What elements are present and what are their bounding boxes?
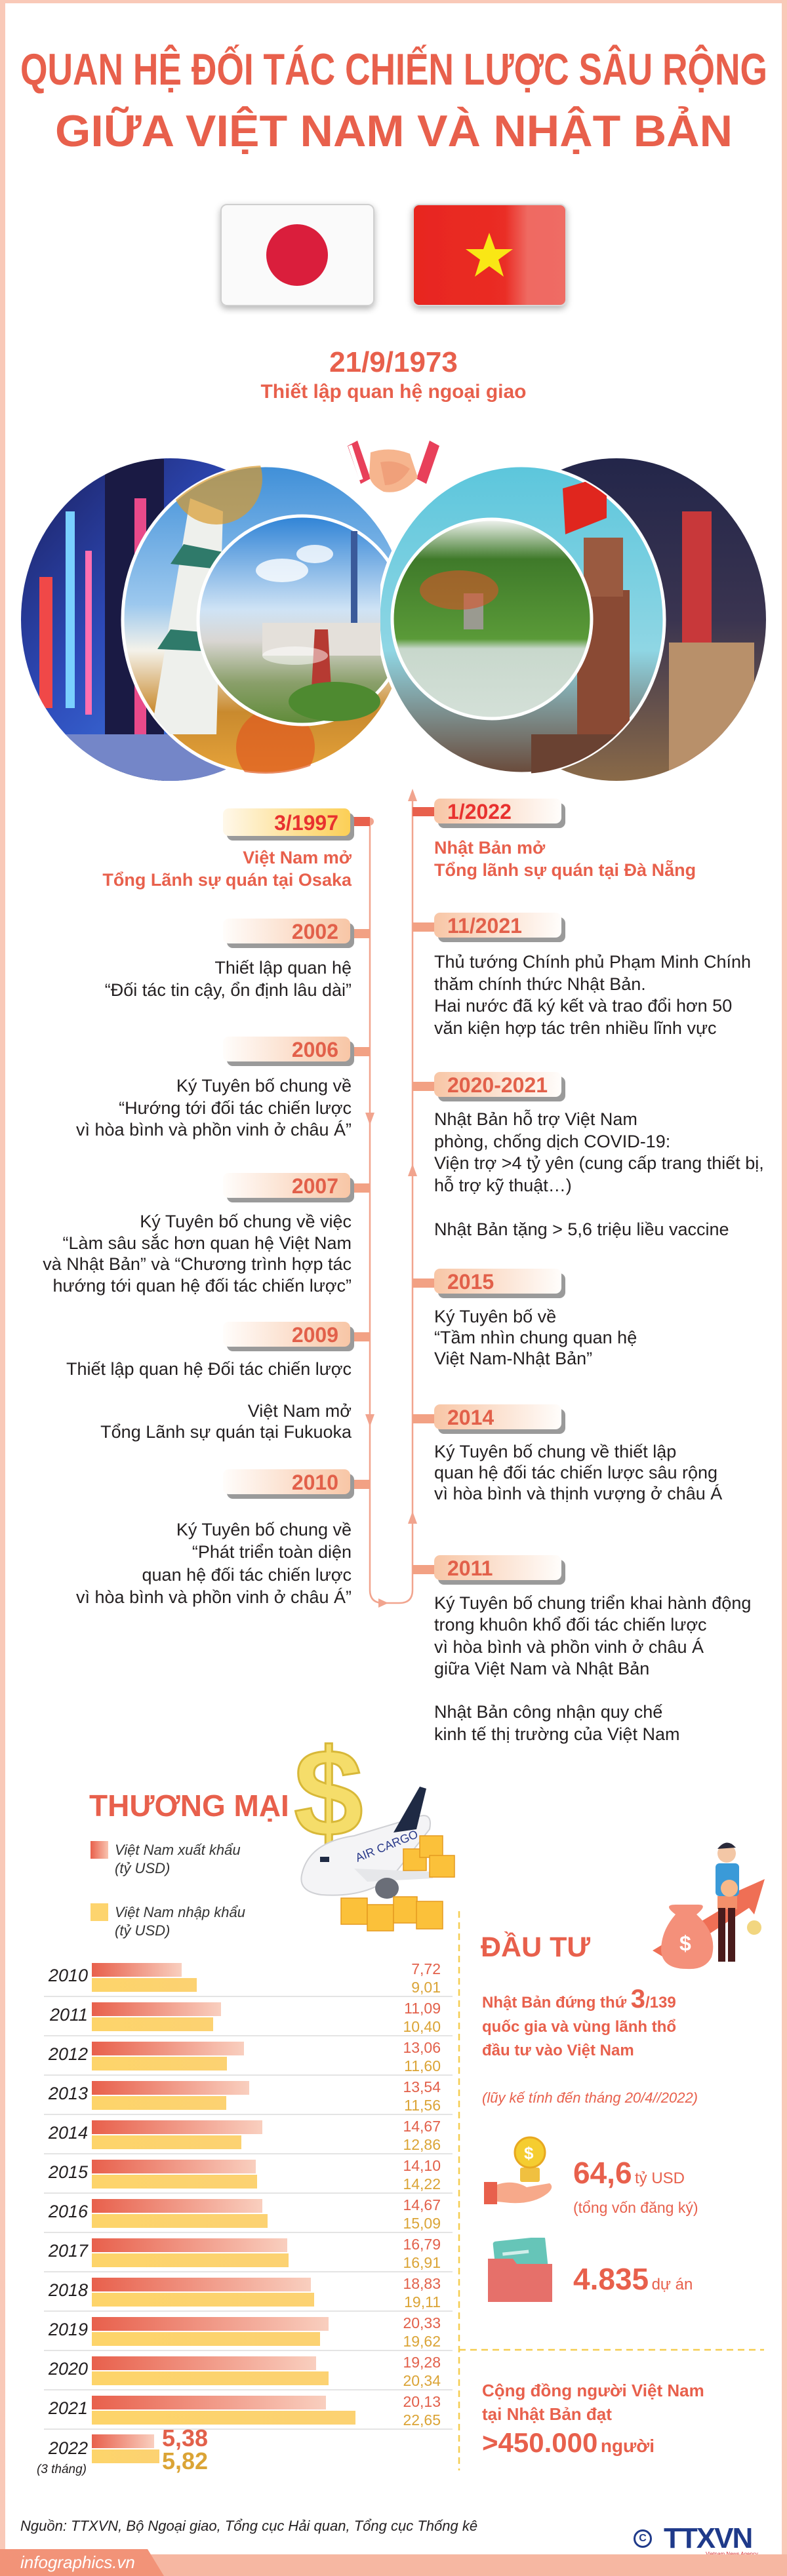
- bar chart: trade: 14,10: [403, 2157, 441, 2174]
- stat: projects: 4.835 dự án: [573, 2262, 693, 2296]
- bar chart: trade: 2019: [48, 2320, 88, 2339]
- flags: [216, 203, 571, 313]
- logo: TTXVN: Vietnam News Agency: [706, 2551, 758, 2557]
- bar chart: trade: 14,67: [403, 2196, 441, 2213]
- text: 2007: hướng tới quan hệ đối tác chiến lược”: [52, 1276, 352, 1296]
- text: 2015: Việt Nam-Nhật Bản”: [434, 1349, 592, 1368]
- text: 2006: “Hướng tới đối tác chiến lược: [119, 1098, 352, 1117]
- heading: THƯƠNG MẠI: THƯƠNG MẠI: [89, 1789, 289, 1823]
- badge: 2007: [223, 1173, 370, 1202]
- text: Vietnamese community: Cộng đồng người Việt Nam: [482, 2381, 704, 2400]
- text: 2010: Ký Tuyên bố chung về: [176, 1520, 352, 1539]
- text: cumulative note: (lũy kế tính đến tháng 20/4//2022): [482, 2090, 698, 2106]
- photo: flag tower: [378, 466, 664, 787]
- badge: 2011: 2011: [447, 1556, 493, 1580]
- bar chart: trade: 16,91: [403, 2254, 441, 2271]
- bar chart: trade: 19,62: [403, 2333, 441, 2350]
- text: 2014: quan hệ đối tác chiến lược sâu rộng: [434, 1463, 717, 1482]
- bar chart: trade: 2021: [48, 2398, 88, 2418]
- legend: import: [91, 1903, 245, 1939]
- text: 11/2021: văn kiện hợp tác trên nhiều lĩnh vực: [434, 1018, 717, 1037]
- text: 11/2021: [434, 952, 751, 1037]
- text: 11/2021: Hai nước đã ký kết và trao đổi hơn 50: [434, 996, 732, 1016]
- bar chart: trade: 14,67: [403, 2118, 441, 2135]
- bar chart: trade: 22,65: [403, 2411, 441, 2428]
- text: investment ranking: [482, 1985, 676, 2059]
- text: 2010: quan hệ đối tác chiến lược: [142, 1565, 352, 1585]
- photo collage: Vietnam: [380, 458, 766, 781]
- footer band: [0, 2554, 787, 2576]
- legend: export: (tỷ USD): [115, 1860, 170, 1876]
- text: 2020-2021: Nhật Bản tặng > 5,6 triệu liều vaccine: [434, 1219, 729, 1239]
- text: 2015: [434, 1307, 637, 1368]
- text: 2015: Ký Tuyên bố về: [434, 1307, 556, 1326]
- footer: infographics.vn tab: [0, 2549, 164, 2576]
- bar chart: trade: 13,06: [403, 2039, 441, 2056]
- bar chart: trade: 2017: [48, 2241, 89, 2261]
- badge: 3/1997: 3/1997: [274, 811, 338, 835]
- text: 2014: vì hòa bình và thịnh vượng ở châu Á: [434, 1484, 722, 1503]
- bar chart: trade: 18,83: [403, 2275, 441, 2292]
- text: investment ranking: Nhật Bản đứng thứ 3/139: [482, 1985, 676, 2013]
- badge: 1/2022: [413, 799, 565, 828]
- bar chart: trade: 2014: [48, 2123, 88, 2143]
- badge: 2009: 2009: [292, 1323, 338, 1347]
- bar chart: trade: 2015: [48, 2162, 89, 2182]
- bar chart: trade: 19,11: [404, 2293, 441, 2310]
- text: 2011: kinh tế thị trường của Việt Nam: [434, 1724, 679, 1744]
- illustration: investor with money bag: [653, 1842, 765, 1970]
- badges left: [223, 799, 565, 1585]
- text: investment ranking: quốc gia và vùng lãnh thổ: [482, 2018, 676, 2035]
- legend: [91, 1841, 245, 1939]
- text: 2015: “Tầm nhìn chung quan hệ: [434, 1328, 637, 1347]
- heading: ĐẦU TƯ: ĐẦU TƯ: [481, 1932, 590, 1963]
- logo: TTXVN: C: [639, 2533, 647, 2544]
- bar chart: trade: 2012: [48, 2044, 88, 2064]
- bar chart: trade: 11,60: [404, 2057, 441, 2074]
- badge: 2002: [223, 919, 370, 948]
- text: 2006: [76, 1076, 352, 1139]
- icon: project folder: [488, 2238, 552, 2302]
- photo: skytree city: [198, 516, 407, 724]
- text: 2007: Ký Tuyên bố chung về việc: [140, 1212, 352, 1231]
- text: 2002: [105, 958, 352, 999]
- text: 1/2022: Nhật Bản mở: [434, 838, 545, 858]
- bar chart: trade: 2011: [49, 2005, 88, 2025]
- text: 2007: và Nhật Bản” và “Chương trình hợp tác: [43, 1254, 352, 1274]
- date heading: Thiết lập quan hệ ngoại giao: [260, 381, 526, 403]
- icon: Vietnam flag: [413, 205, 566, 306]
- badge: 2006: 2006: [292, 1038, 338, 1061]
- badge: 2010: 2010: [292, 1471, 338, 1494]
- bar chart: trade: 20,13: [403, 2393, 441, 2410]
- bar chart: trade: 19,28: [403, 2354, 441, 2371]
- text: 2020-2021: Nhật Bản hỗ trợ Việt Nam: [434, 1109, 637, 1129]
- badge: 2020-2021: 2020-2021: [447, 1073, 548, 1097]
- text: Vietnamese community: [482, 2381, 704, 2458]
- bar chart: trade: 10,40: [403, 2018, 441, 2035]
- bar chart: trade: 5,38: [162, 2425, 208, 2451]
- bar chart: trade: 2010: [48, 1966, 88, 1985]
- footer: infographics.vn tab: infographics.vn: [20, 2552, 135, 2572]
- photo collage: Japan: [21, 458, 392, 781]
- text: 2011: [434, 1593, 751, 1744]
- bar chart: trade: 20,34: [403, 2372, 441, 2389]
- text: 2011: giữa Việt Nam và Nhật Bản: [434, 1659, 649, 1678]
- bar chart: trade: (3 tháng): [37, 2463, 87, 2476]
- source: Nguồn: TTXVN, Bộ Ngoại giao, Tổng cục Hải quan, Tổng cục Thống kê: [20, 2518, 477, 2534]
- text: Fukuoka: Việt Nam mở: [248, 1401, 352, 1421]
- icon: hand with coin: $: [524, 2143, 534, 2163]
- text: 2010: [76, 1520, 352, 1607]
- title: GIỮA VIỆT NAM VÀ NHẬT BẢN: [55, 106, 733, 156]
- bar chart: trade: 12,86: [403, 2136, 441, 2153]
- text: 2011: Ký Tuyên bố chung triển khai hành động: [434, 1593, 751, 1613]
- text: 2011: trong khuôn khổ đối tác chiến lược: [434, 1615, 707, 1635]
- text: 3/1997: Tổng Lãnh sự quán tại Osaka: [102, 869, 352, 889]
- text: 11/2021: thăm chính thức Nhật Bản.: [434, 974, 646, 994]
- photo: night city: [561, 458, 766, 781]
- timeline: [223, 789, 565, 1608]
- text: 2007: “Làm sâu sắc hơn quan hệ Việt Nam: [63, 1233, 352, 1253]
- legend: export: Việt Nam xuất khẩu: [115, 1842, 241, 1858]
- badge: 2011: [413, 1555, 565, 1585]
- text: investment ranking: đầu tư vào Việt Nam: [482, 2042, 634, 2059]
- illustration: dollar and cargo plane: AIR CARGO: [353, 1827, 420, 1865]
- illustration: investor with money bag: $: [679, 1932, 691, 1955]
- title: [20, 44, 767, 156]
- icon: handshake: [348, 441, 439, 492]
- text: 2006: vì hòa bình và phồn vinh ở châu Á”: [76, 1120, 352, 1139]
- text: 1/2022: [434, 838, 696, 880]
- badge: 11/2021: 11/2021: [447, 914, 522, 938]
- badge: 11/2021: [413, 913, 565, 942]
- text: 2014: Ký Tuyên bố chung về thiết lập: [434, 1442, 676, 1461]
- text: 2020-2021: [434, 1109, 764, 1239]
- text: 2007: [43, 1212, 352, 1296]
- stat: registered capital: 64,6 tỷ USD: [573, 2156, 685, 2190]
- badge: 2009: [223, 1322, 370, 1351]
- badge: 2010: [223, 1469, 370, 1499]
- icon: Japan flag: [221, 205, 374, 306]
- logo: TTXVN: TTXVN: [664, 2522, 752, 2554]
- legend: export: [91, 1841, 241, 1876]
- badge: 2020-2021: [413, 1072, 565, 1101]
- bar chart: trade: 16,79: [403, 2236, 441, 2253]
- text: 2011: Nhật Bản công nhận quy chế: [434, 1702, 662, 1722]
- badge: 2006: [223, 1037, 370, 1066]
- text: 2002: “Đối tác tin cậy, ổn định lâu dài”: [105, 980, 352, 999]
- photo: neon street: [21, 458, 226, 781]
- badge: 2014: 2014: [447, 1406, 494, 1429]
- text: Vietnamese community: tại Nhật Bản đạt: [482, 2404, 612, 2424]
- date heading: 21/9/1973: [329, 346, 458, 378]
- text: 1/2022: Tổng lãnh sự quán tại Đà Nẵng: [434, 860, 696, 880]
- text: 2010: “Phát triển toàn diện: [192, 1542, 352, 1562]
- timeline lines: [370, 793, 413, 1603]
- legend: import: (tỷ USD): [115, 1922, 170, 1939]
- text: 2020-2021: hỗ trợ kỹ thuật…): [434, 1175, 572, 1195]
- text: 2020-2021: Viện trợ >4 tỷ yên (cung cấp trang thiết bị,: [434, 1153, 764, 1173]
- bar chart: trade: 5,82: [162, 2447, 208, 2474]
- illustration: dollar and cargo plane: [294, 1737, 455, 1932]
- photo: castle: [121, 466, 392, 774]
- bar chart: trade: 11,56: [404, 2097, 441, 2114]
- bar chart: trade: 2016: [48, 2202, 89, 2221]
- legend: import: Việt Nam nhập khẩu: [115, 1904, 245, 1920]
- badge: 3/1997: [223, 808, 370, 841]
- bar chart: trade: 2018: [48, 2280, 88, 2300]
- text: 2006: Ký Tuyên bố chung về: [176, 1076, 352, 1096]
- text: 2002: Thiết lập quan hệ: [214, 958, 352, 978]
- bar chart: trade: 14,22: [403, 2175, 441, 2192]
- text: 2014: [434, 1442, 723, 1503]
- photo: Hoan Kiem lake: [392, 519, 592, 719]
- text: 2009: Thiết lập quan hệ Đối tác chiến lược: [66, 1359, 352, 1379]
- bar chart: trade: 11,09: [404, 2000, 441, 2017]
- text: Fukuoka: Tổng Lãnh sự quán tại Fukuoka: [100, 1422, 352, 1442]
- bar chart: trade: 9,01: [411, 1979, 441, 1996]
- badge: 2014: [413, 1404, 565, 1434]
- bar chart: trade: 15,09: [403, 2215, 441, 2232]
- stat: registered capital: [573, 2156, 698, 2216]
- text: Fukuoka: [100, 1401, 352, 1442]
- badge: 2002: 2002: [292, 920, 338, 943]
- bar chart: trade: 2022: [48, 2438, 88, 2458]
- logo: TTXVN: [634, 2522, 758, 2557]
- bar chart: trade: 2013: [48, 2084, 88, 2103]
- bar chart: trade: 20,33: [403, 2314, 441, 2331]
- date heading: [260, 346, 526, 403]
- bar chart: trade: 7,72: [411, 1960, 441, 1977]
- bar chart: trade: 2020: [48, 2359, 88, 2379]
- text: 3/1997: [102, 848, 352, 889]
- stat: registered capital: (tổng vốn đăng ký): [573, 2199, 698, 2216]
- badge: 1/2022: 1/2022: [447, 800, 512, 823]
- text: 2010: vì hòa bình và phồn vinh ở châu Á”: [76, 1587, 352, 1607]
- badge: 2015: [413, 1269, 565, 1298]
- icon: hand with coin: [484, 2136, 552, 2204]
- text: Vietnamese community: >450.000 người: [482, 2427, 655, 2458]
- text: 11/2021: Thủ tướng Chính phủ Phạm Minh Chính: [434, 952, 751, 972]
- text: 3/1997: Việt Nam mở: [243, 848, 352, 867]
- badge: 2007: 2007: [292, 1174, 338, 1198]
- text: 2020-2021: phòng, chống dịch COVID-19:: [434, 1132, 670, 1151]
- bar chart: trade: [37, 1960, 453, 2476]
- bar chart: trade: 13,54: [403, 2078, 441, 2095]
- text: 2011: vì hòa bình và phồn vinh ở châu Á: [434, 1637, 704, 1657]
- dividers: [458, 1911, 764, 2470]
- badge: 2015: 2015: [447, 1270, 494, 1294]
